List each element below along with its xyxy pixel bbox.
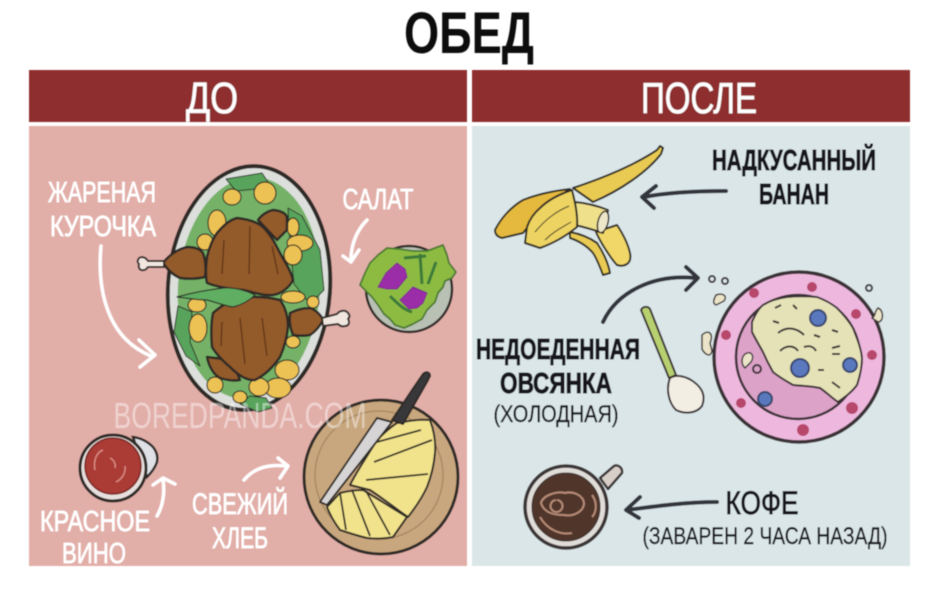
arrow: coffee — [626, 497, 717, 518]
illustration: coffee cup — [525, 465, 622, 548]
label: uneaten oatmeal — [476, 334, 640, 428]
arrow: banana — [642, 186, 726, 208]
chicken bottom — [207, 357, 240, 380]
chicken top — [258, 210, 287, 240]
heading: after: ПОСЛЕ — [641, 74, 757, 123]
knife — [320, 418, 392, 505]
arrow: chicken — [100, 246, 155, 367]
label: coffee: КОФЕ — [726, 485, 798, 521]
label: bitten banana — [712, 143, 876, 211]
label: fried chicken: ЖАРЕНАЯ — [48, 177, 156, 209]
label: fried chicken: КУРОЧКА — [50, 211, 157, 243]
illustration: wine glass — [80, 435, 157, 501]
label: uneaten oatmeal: ОВСЯНКА — [500, 368, 612, 400]
illustration: oatmeal bowl — [702, 272, 884, 442]
label: red wine — [40, 506, 150, 570]
title: ОБЕД — [404, 1, 534, 66]
panel: after background — [472, 126, 910, 566]
label: fresh bread: ХЛЕБ — [212, 522, 268, 555]
arrow: oatmeal — [603, 267, 698, 322]
label: uneaten oatmeal: (ХОЛОДНАЯ) — [494, 401, 618, 428]
panel: before header — [29, 70, 467, 123]
label: fried chicken — [48, 177, 157, 243]
label: bitten banana: БАНАН — [759, 179, 829, 211]
label: red wine: КРАСНОЕ — [40, 506, 150, 538]
label: red wine: ВИНО — [62, 538, 126, 570]
label: bitten banana: НАДКУСАННЫЙ — [712, 143, 876, 177]
illustration: salad bowl — [360, 245, 456, 332]
panel: before background — [29, 126, 467, 566]
label: fresh bread: СВЕЖИЙ — [192, 487, 288, 521]
arrow: wine — [153, 478, 175, 516]
arrow: bread — [244, 458, 288, 480]
panel: after header — [472, 70, 910, 123]
arrow: salad — [343, 220, 367, 262]
illustration: bread on board — [304, 372, 458, 554]
label: salad: САЛАТ — [342, 184, 414, 216]
watermark: BOREDPANDA.COM — [114, 395, 366, 436]
illustration: bitten banana — [495, 146, 663, 275]
heading: before: ДО — [186, 74, 238, 123]
illustration: spoon — [641, 307, 704, 413]
herb — [177, 288, 255, 307]
label: fresh bread — [192, 487, 288, 555]
label: uneaten oatmeal: НЕДОЕДЕННАЯ — [476, 334, 640, 366]
illustration: roast chicken plate — [138, 161, 350, 415]
